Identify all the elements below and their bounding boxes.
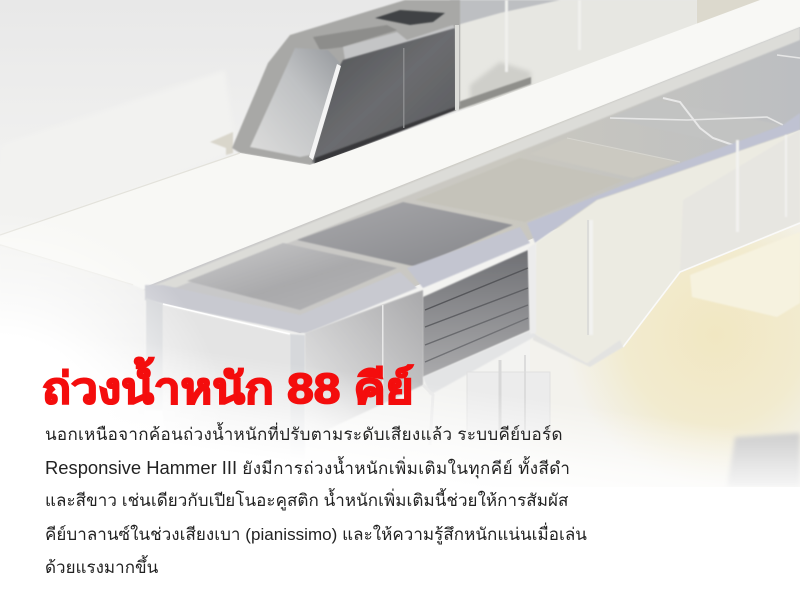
upper white key [0, 70, 234, 233]
title: ถ่วงน้ำหนัก 88 คีย์ [42, 366, 414, 413]
side rail [407, 227, 530, 288]
dark chip [375, 10, 445, 25]
white key front [0, 245, 145, 420]
yellow felt and lower parts [530, 215, 800, 495]
body text: Responsive Hammer III ยังมีการถ่วงน้ำหนักเพิ่มเติมในทุกคีย์ ทั้งสีดำ [45, 457, 570, 478]
second grey panel [297, 202, 513, 267]
body text [45, 422, 587, 577]
light bar [343, 25, 456, 60]
lower side wall of tray [146, 130, 800, 470]
body text: คีย์บาลานซ์ในช่วงเสียงเบา (pianissimo) และให้ความรู้สึกหนักแน่นเมื่อเล่น [45, 525, 587, 544]
first grey panel [187, 243, 397, 310]
louvred weight [423, 243, 536, 395]
body text: และสีขาว เช่นเดียวกับเปียโนอะคูสติก น้ำหนักเพิ่มเติมนี้ช่วยให้การสัมผัส [45, 491, 568, 510]
white fade at left [0, 210, 230, 487]
grey block at lower right [727, 433, 800, 487]
light front face [250, 48, 340, 157]
body text: นอกเหนือจากค้อนถ่วงน้ำหนักที่ปรับตามระดับเสียงแล้ว ระบบคีย์บอร์ด [45, 425, 563, 444]
third panel [415, 158, 625, 222]
fourth panel [530, 138, 680, 178]
white key top [0, 0, 800, 290]
rear key section [450, 0, 765, 112]
top dark band [313, 25, 397, 50]
white fade at bottom [0, 300, 800, 487]
fifth panel [610, 100, 783, 145]
panel seams and ridges [567, 55, 800, 162]
right wall [533, 130, 800, 363]
transparent weight tray [143, 27, 800, 333]
body text: ด้วยแรงมากขึ้น [45, 558, 158, 577]
front rail [145, 272, 417, 333]
tray legs [423, 355, 550, 445]
key outline [232, 0, 460, 165]
black key weight [232, 0, 460, 165]
dark side face [312, 28, 456, 163]
